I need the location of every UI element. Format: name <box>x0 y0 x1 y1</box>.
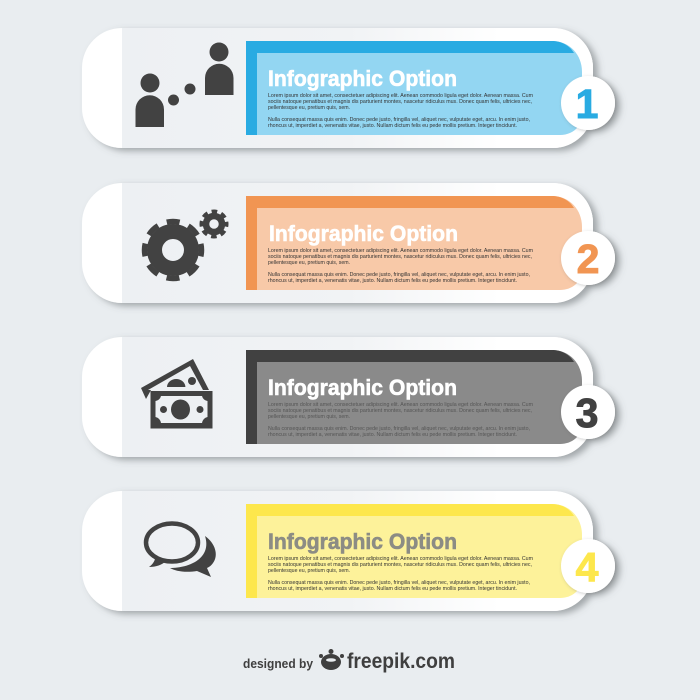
body text: sociis natoque penatibus et magnis dis parturient montes, nascetur ridiculus mus. Donec quam felis, ultricies nec, <box>268 254 532 260</box>
number badge 2 <box>561 231 615 285</box>
number badge 1 <box>561 76 615 130</box>
panel top strip <box>246 504 574 598</box>
panel top strip <box>246 41 574 135</box>
panel: option 2 <box>82 183 615 303</box>
panel top strip <box>246 196 574 290</box>
card body <box>82 337 615 457</box>
body text: Lorem ipsum dolor sit amet, consectetuer adipiscing elit. Aenean commodo ligula eget dolor. Aenean massa. Cum <box>268 402 533 408</box>
designed by label: designed by <box>243 656 314 671</box>
body text: rhoncus ut, imperdiet a, venenatis vitae, justo. Nullam dictum felis eu pede mollis pretium. Integer tincidunt. <box>268 278 517 284</box>
body text: Nulla consequat massa quis enim. Donec pede justo, fringilla vel, aliquet nec, vulputate eget, arcu. In enim justo, <box>268 580 530 586</box>
body text: sociis natoque penatibus et magnis dis parturient montes, nascetur ridiculus mus. Donec quam felis, ultricies nec, <box>268 99 532 105</box>
card shaded area <box>122 337 593 457</box>
body text: Lorem ipsum dolor sit amet, consectetuer adipiscing elit. Aenean commodo ligula eget dolor. Aenean massa. Cum <box>268 556 533 562</box>
body text <box>268 402 533 438</box>
body text: rhoncus ut, imperdiet a, venenatis vitae, justo. Nullam dictum felis eu pede mollis pretium. Integer tincidunt. <box>268 586 517 592</box>
card body <box>82 28 615 148</box>
body text <box>268 93 533 129</box>
number badge 4: 4 <box>576 544 599 590</box>
body text <box>268 556 533 592</box>
card shaded area <box>122 183 593 303</box>
icon: people connected <box>136 42 234 127</box>
body text: Lorem ipsum dolor sit amet, consectetuer adipiscing elit. Aenean commodo ligula eget dolor. Aenean massa. Cum <box>268 93 533 99</box>
panel: option 1 <box>82 28 615 148</box>
panel: option 3 <box>82 337 615 457</box>
number badge 1: 1 <box>576 81 598 127</box>
number badge 4 <box>561 539 615 593</box>
heading: Infographic Option <box>268 66 457 91</box>
heading: Infographic Option <box>268 375 457 400</box>
body text: pellentesque eu, pretium quis, sem. <box>268 105 350 111</box>
body text: rhoncus ut, imperdiet a, venenatis vitae, justo. Nullam dictum felis eu pede mollis pretium. Integer tincidunt. <box>268 432 517 438</box>
body text: sociis natoque penatibus et magnis dis parturient montes, nascetur ridiculus mus. Donec quam felis, ultricies nec, <box>268 562 532 568</box>
body text: sociis natoque penatibus et magnis dis parturient montes, nascetur ridiculus mus. Donec quam felis, ultricies nec, <box>268 408 532 414</box>
card body <box>82 491 615 611</box>
panel top strip <box>246 350 574 444</box>
body text: Nulla consequat massa quis enim. Donec pede justo, fringilla vel, aliquet nec, vulputate eget, arcu. In enim justo, <box>268 117 530 123</box>
body text: rhoncus ut, imperdiet a, venenatis vitae, justo. Nullam dictum felis eu pede mollis pretium. Integer tincidunt. <box>268 123 517 129</box>
panel: option 4 <box>82 491 615 611</box>
colored panel <box>246 504 582 598</box>
heading: Infographic Option <box>269 221 458 246</box>
freepik wordmark: freepik.com <box>347 650 455 673</box>
icon: banknotes <box>141 359 212 428</box>
number badge 3 <box>561 385 615 439</box>
body text: Nulla consequat massa quis enim. Donec pede justo, fringilla vel, aliquet nec, vulputate eget, arcu. In enim justo, <box>268 426 530 432</box>
footer credit <box>243 649 455 673</box>
icon: gears <box>144 212 226 278</box>
icon: freepik logo <box>319 649 344 670</box>
body text: Nulla consequat massa quis enim. Donec pede justo, fringilla vel, aliquet nec, vulputate eget, arcu. In enim justo, <box>268 272 530 278</box>
body text <box>268 248 533 284</box>
body text: Lorem ipsum dolor sit amet, consectetuer adipiscing elit. Aenean commodo ligula eget dolor. Aenean massa. Cum <box>268 248 533 254</box>
colored panel <box>246 350 582 444</box>
card body <box>82 183 615 303</box>
colored panel <box>246 41 582 135</box>
number badge 2: 2 <box>577 236 599 282</box>
number badge 3: 3 <box>576 390 598 436</box>
card shaded area <box>122 28 593 148</box>
body text: pellentesque eu, pretium quis, sem. <box>268 260 350 266</box>
colored panel <box>246 196 582 290</box>
body text: pellentesque eu, pretium quis, sem. <box>268 414 350 420</box>
card shaded area <box>122 491 593 611</box>
icon: speech bubbles <box>146 524 216 577</box>
body text: pellentesque eu, pretium quis, sem. <box>268 568 350 574</box>
heading: Infographic Option <box>268 529 457 554</box>
